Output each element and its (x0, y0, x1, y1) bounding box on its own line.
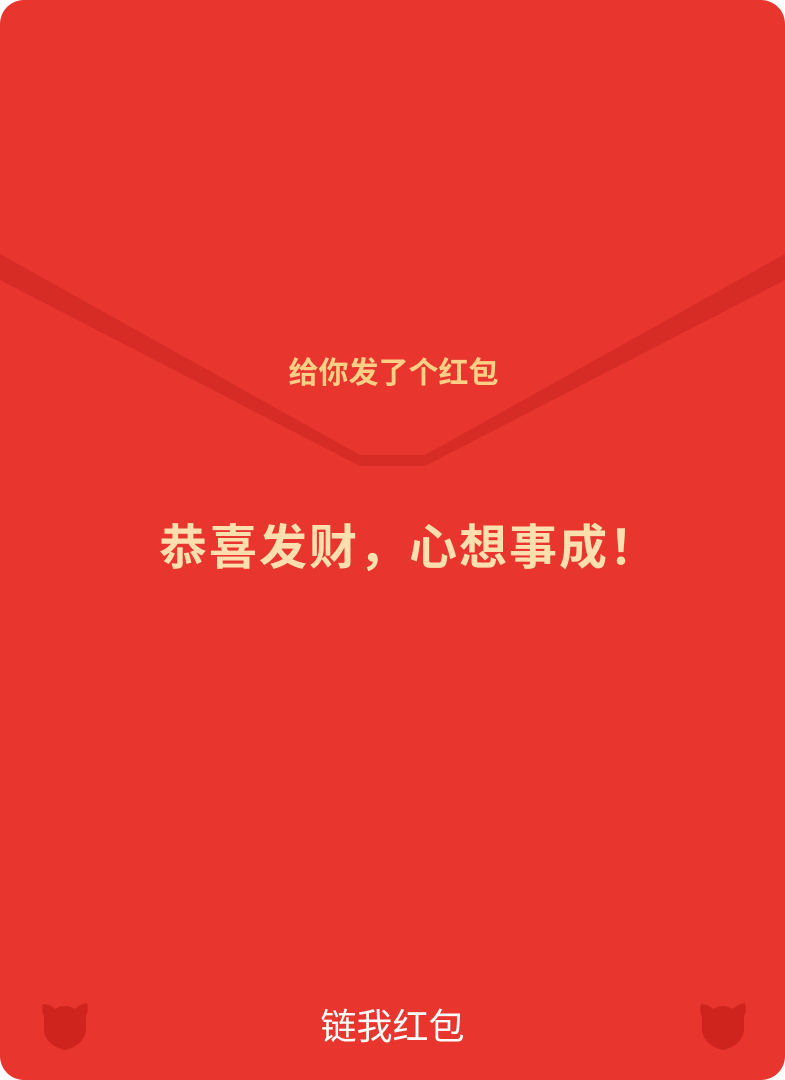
bottom label: 链我红包 (320, 1006, 464, 1047)
icon: left cat mascot (42, 1003, 88, 1050)
greeting headline: 恭喜发财，心想事成！ (159, 522, 659, 575)
subtitle: 给你发了个红包 (288, 357, 498, 390)
icon: right cat mascot (700, 1003, 746, 1050)
